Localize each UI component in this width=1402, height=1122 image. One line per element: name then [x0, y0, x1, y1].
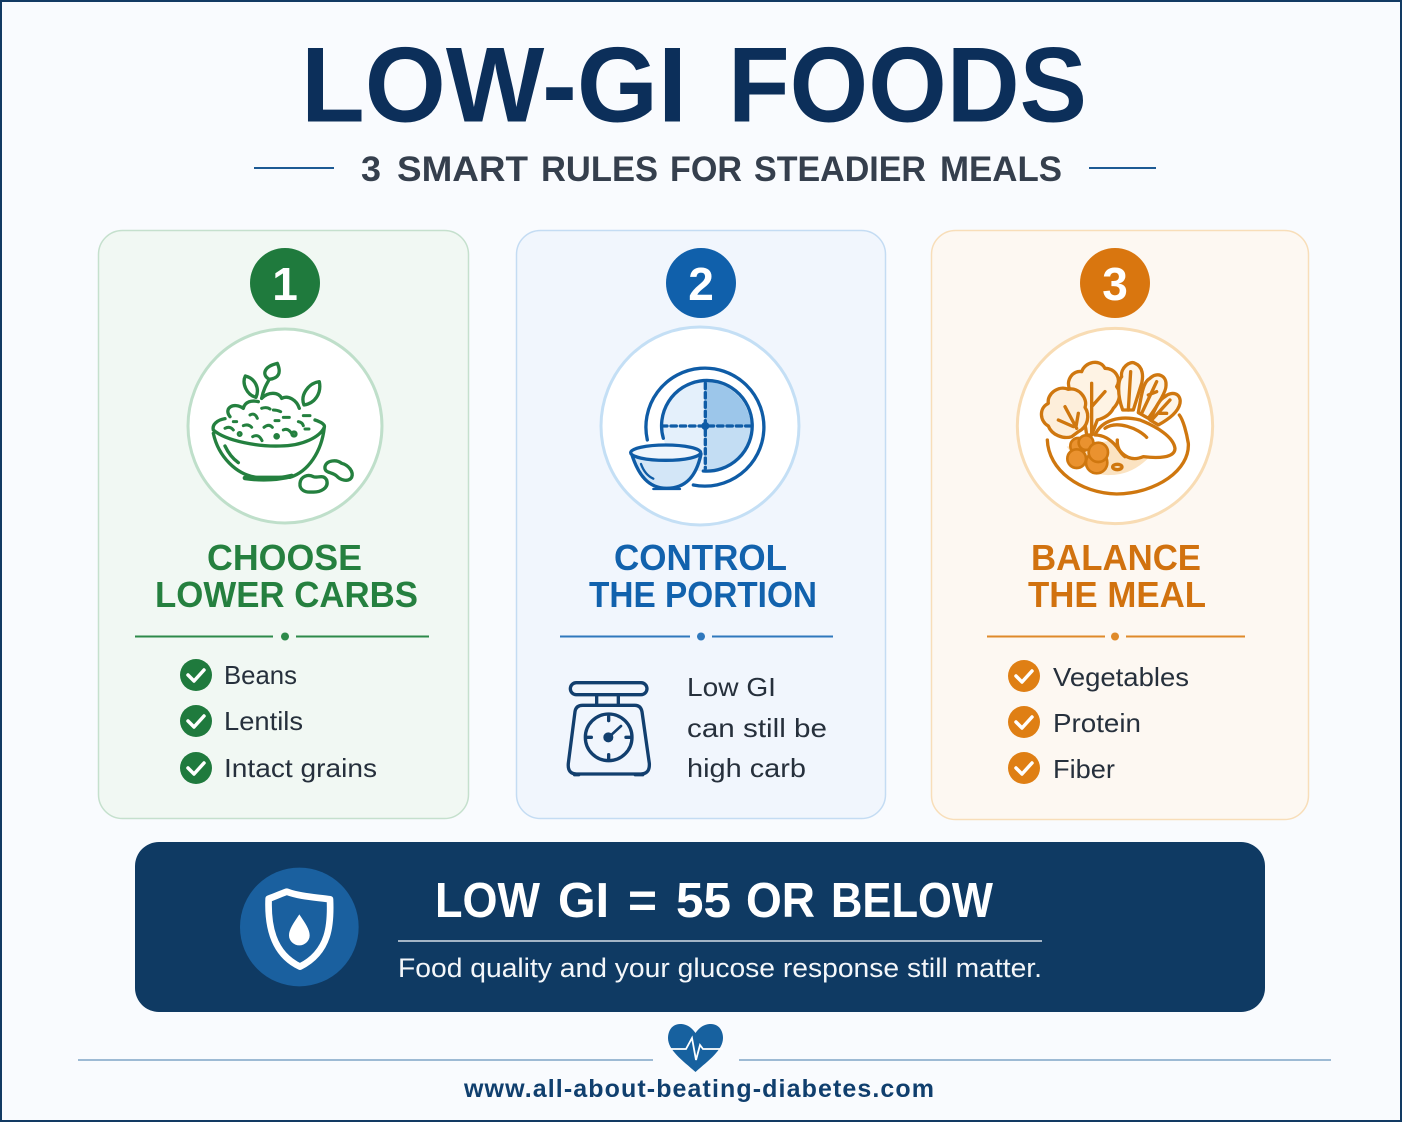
icon: bowl of beans [188, 329, 382, 523]
heading: balance the meal [1028, 537, 1206, 615]
heading: balance the meal: THE MEAL [1028, 574, 1206, 615]
icon: kitchen scale [568, 683, 649, 775]
heading: control the portion: CONTROL [614, 537, 787, 578]
badge: number 3: 3 [1102, 258, 1128, 310]
panel: choose lower carbs [98, 230, 468, 818]
badge: number 1: 1 [272, 258, 298, 310]
title: LOW-GI [301, 24, 687, 144]
title [301, 24, 1087, 144]
heading: choose lower carbs: LOWER CARBS [155, 574, 418, 615]
heading: low gi threshold: 55 [676, 874, 731, 928]
icon: plate and bowl [601, 327, 799, 525]
text: low gi can still be high carb [687, 672, 827, 783]
heading: low gi threshold [435, 874, 994, 928]
badge: number 2: 2 [688, 258, 714, 310]
subtitle: STEADIER [754, 150, 926, 189]
text: low gi can still be high carb: high carb [687, 753, 806, 783]
list: balanced meal items: Protein [1053, 708, 1141, 738]
footer [78, 1024, 1331, 1103]
callout: low gi banner [135, 842, 1265, 1012]
panel: control the portion [516, 230, 886, 818]
list: balanced meal items [1008, 660, 1189, 784]
heading: low gi threshold: BELOW [831, 874, 994, 928]
list: lower carb foods: Beans [224, 660, 297, 690]
subtitle: 3 [361, 150, 381, 189]
icon: balanced plate [1017, 328, 1213, 524]
heading: choose lower carbs: CHOOSE [207, 537, 362, 578]
heading: control the portion [589, 537, 817, 615]
subtitle [254, 150, 1156, 189]
icon: heart with pulse [668, 1024, 723, 1072]
badge: number 1 [250, 248, 320, 318]
website url: www.all-about-beating-diabetes.com [463, 1075, 934, 1103]
icon: shield with drop [240, 868, 359, 986]
list: balanced meal items: Fiber [1053, 754, 1115, 784]
list: lower carb foods: Lentils [224, 706, 303, 736]
title: FOODS [728, 24, 1087, 144]
list: balanced meal items: Vegetables [1053, 662, 1189, 692]
subtitle: FOR [670, 150, 742, 189]
heading: low gi threshold: LOW [435, 874, 541, 928]
note: food quality: Food quality and your glucose response still matter. [398, 953, 1042, 983]
heading: low gi threshold: GI [558, 874, 609, 928]
heading: choose lower carbs [155, 537, 418, 615]
text: low gi can still be high carb: Low GI [687, 672, 776, 702]
subtitle: MEALS [940, 150, 1062, 189]
heading: low gi threshold: OR [746, 874, 815, 928]
panel: balance the meal [932, 230, 1308, 820]
heading: low gi threshold: = [628, 874, 657, 928]
badge: number 2 [666, 248, 736, 318]
subtitle: RULES [541, 150, 658, 189]
heading: control the portion: THE PORTION [589, 574, 817, 615]
list: lower carb foods: Intact grains [224, 753, 377, 783]
subtitle: SMART [397, 150, 528, 189]
heading: balance the meal: BALANCE [1031, 537, 1201, 578]
badge: number 3 [1080, 248, 1150, 318]
text: low gi can still be high carb: can still be [687, 713, 827, 743]
list: lower carb foods [180, 659, 377, 784]
